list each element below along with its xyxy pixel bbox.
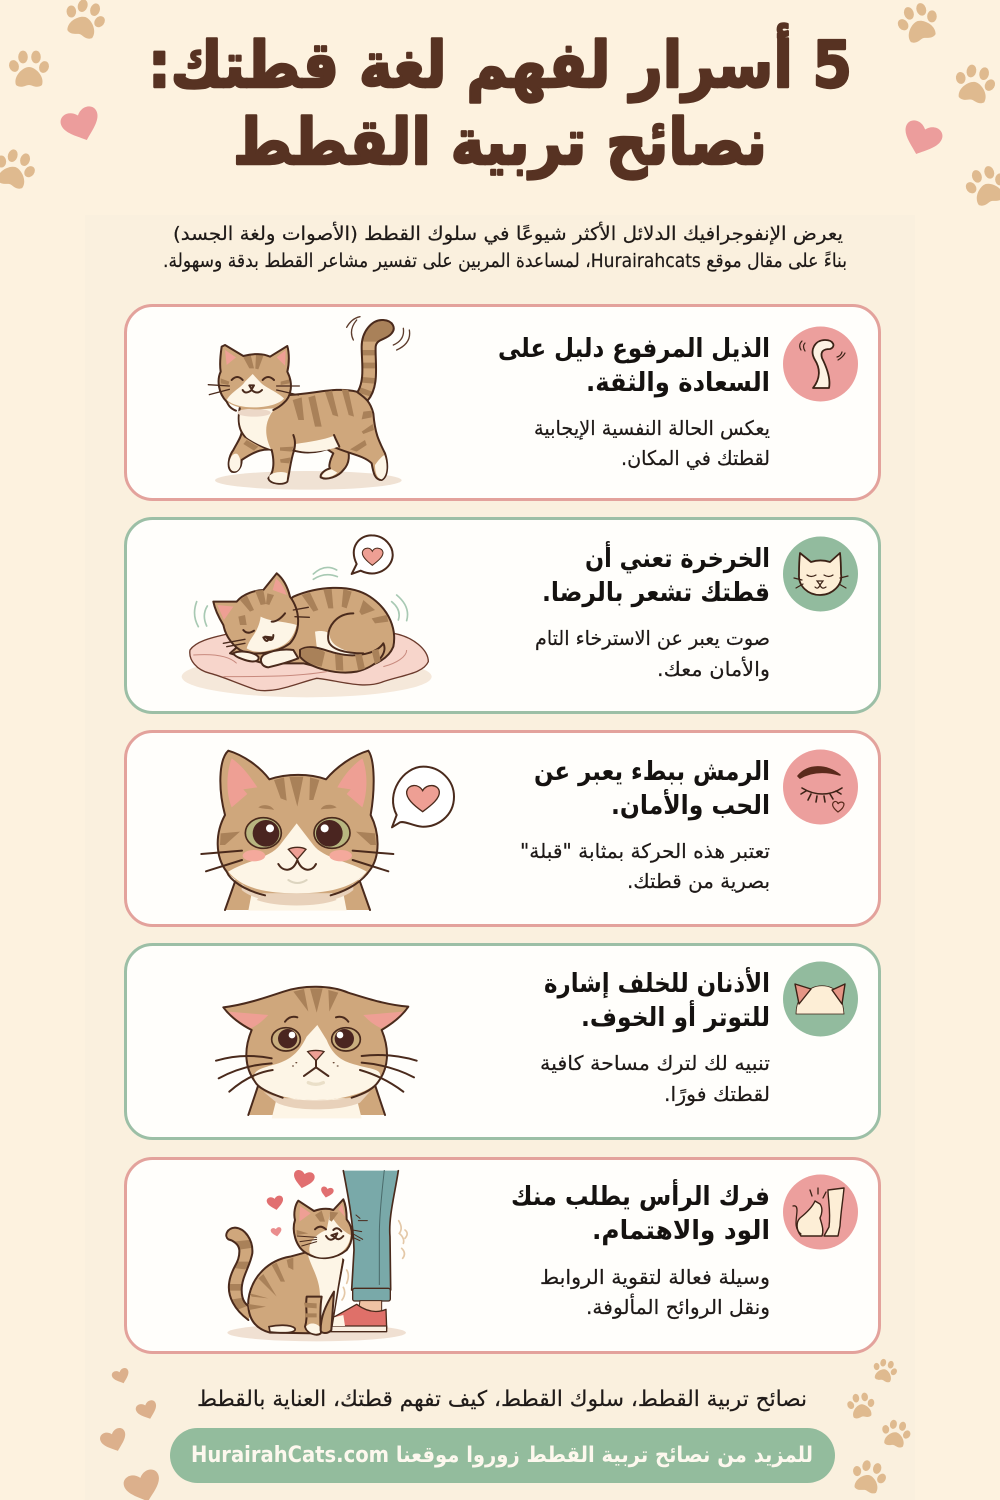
icon: tail bbox=[783, 326, 858, 402]
heading: blink: الرمش ببطء يعبر عن bbox=[534, 757, 770, 787]
heading: tail: الذيل المرفوع دليل على bbox=[498, 334, 770, 364]
heading: rubbing: الود والاهتمام. bbox=[592, 1216, 770, 1246]
illustration: cat rubbing against a leg bbox=[226, 1169, 407, 1341]
text: tail: لقطتك في المكان. bbox=[621, 446, 770, 471]
text: blink: بصرية من قطتك. bbox=[627, 869, 770, 893]
icon: ears back bbox=[783, 962, 858, 1036]
heading: rubbing bbox=[511, 1179, 770, 1246]
text: tail bbox=[534, 416, 770, 471]
text: rubbing: ونقل الروائح المألوفة. bbox=[586, 1293, 770, 1319]
text: rubbing: وسيلة فعالة لتقوية الروابط bbox=[540, 1265, 770, 1289]
panel: ears back bbox=[126, 944, 880, 1138]
text: ears bbox=[540, 1051, 770, 1106]
title: 5 أسرار لفهم لغة قطتك: bbox=[148, 23, 852, 103]
panel: tail raised bbox=[126, 306, 880, 500]
heading: tail bbox=[498, 334, 770, 398]
heading: purring: الخرخرة تعني أن bbox=[585, 541, 770, 574]
text: blink bbox=[520, 839, 770, 893]
text: purring: صوت يعبر عن الاسترخاء التام bbox=[535, 626, 770, 650]
background inner panel bbox=[85, 215, 915, 1500]
heading: tail: السعادة والثقة. bbox=[586, 368, 770, 398]
call to action button: للمزيد من نصائح تربية القطط زوروا موقعنا HurairahCats.com bbox=[191, 1443, 813, 1468]
intro text: يعرض الإنفوجرافيك الدلائل الأكثر شيوعًا في سلوك القطط (الأصوات ولغة الجسد) bbox=[173, 222, 843, 245]
illustration: cat walking with raised tail bbox=[208, 317, 410, 490]
heading: purring: قطتك تشعر بالرضا. bbox=[542, 578, 770, 608]
illustration: sleeping cat on cushion with heart bubble bbox=[182, 535, 432, 697]
heading: rubbing: فرك الرأس يطلب منك bbox=[511, 1179, 770, 1212]
text: purring: والأمان معك. bbox=[657, 657, 770, 681]
heading: ears: الأذنان للخلف إشارة bbox=[544, 967, 770, 999]
intro text: بناءً على مقال موقع Hurairahcats، لمساعدة المربين على تفسير مشاعر القطط بدقة وسهولة. bbox=[163, 250, 847, 272]
heading: ears bbox=[544, 967, 770, 1033]
text: blink: تعتبر هذه الحركة بمثابة "قبلة" bbox=[520, 839, 770, 863]
panel: slow blinking bbox=[126, 732, 880, 926]
intro text bbox=[163, 222, 847, 272]
footer keywords: نصائح تربية القطط، سلوك القطط، كيف تفهم قطتك، العناية بالقطط bbox=[197, 1387, 807, 1412]
panel: head rubbing bbox=[126, 1158, 880, 1352]
text: purring bbox=[535, 626, 770, 681]
icon: closed eye bbox=[783, 750, 858, 824]
panel: purring bbox=[126, 518, 880, 712]
text: tail: يعكس الحالة النفسية الإيجابية bbox=[534, 416, 770, 440]
call to action button bbox=[170, 1428, 835, 1483]
heading: purring bbox=[542, 541, 770, 608]
illustration: scared cat face with flat ears bbox=[216, 987, 417, 1118]
illustration: cat face with loving eyes bbox=[201, 751, 454, 911]
text: rubbing bbox=[540, 1265, 770, 1319]
heading: ears: للتوتر أو الخوف. bbox=[581, 1000, 770, 1033]
title bbox=[148, 23, 852, 180]
heading: blink: الحب والأمان. bbox=[611, 789, 770, 821]
text: ears: تنبيه لك لترك مساحة كافية bbox=[540, 1051, 770, 1075]
icon: cat rubbing leg bbox=[783, 1174, 858, 1250]
heading: blink bbox=[534, 757, 770, 821]
title: نصائح تربية القطط bbox=[233, 106, 767, 180]
icon: cat face bbox=[783, 536, 858, 612]
text: ears: لقطتك فورًا. bbox=[664, 1082, 770, 1106]
